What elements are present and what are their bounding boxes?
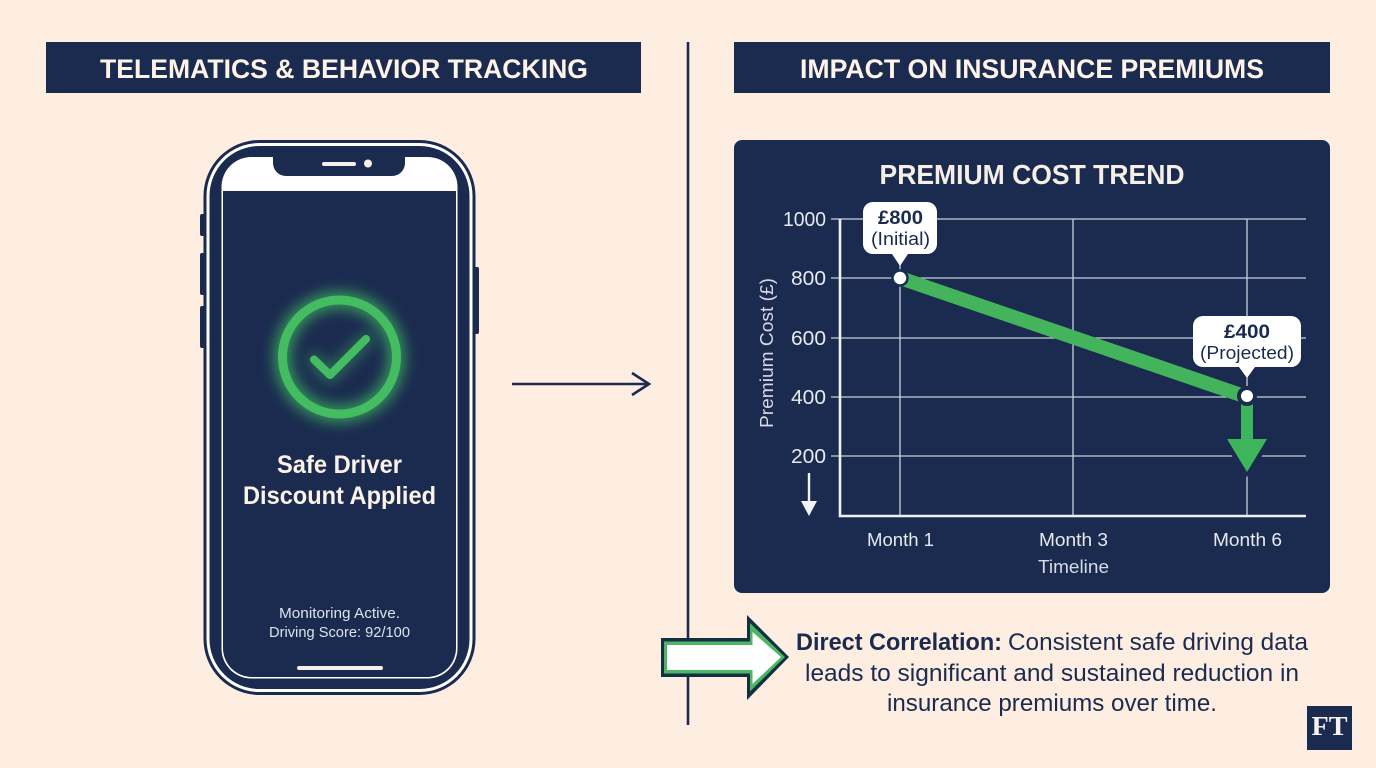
y axis tick labels: 1000 <box>783 209 826 231</box>
data point: initial <box>892 270 908 286</box>
arrow: green outlined pointer <box>661 615 789 700</box>
chart axes <box>840 219 1306 516</box>
callout: £800 initial: £800 <box>878 208 923 229</box>
chart title: PREMIUM COST TREND <box>880 159 1184 190</box>
x axis title: Timeline <box>1038 557 1109 577</box>
right header: premiums: IMPACT ON INSURANCE PREMIUMS <box>800 54 1264 84</box>
discount message: Safe Driver <box>277 451 402 479</box>
discount message <box>243 451 436 510</box>
discount message: Discount Applied <box>243 482 436 510</box>
panel: premium cost trend chart <box>734 140 1330 593</box>
notch speaker and camera <box>322 160 372 168</box>
correlation statement: insurance premiums over time. <box>887 690 1217 717</box>
phone body <box>204 140 476 695</box>
x axis labels: Month 1 <box>867 530 934 550</box>
x axis labels: Month 3 <box>1039 530 1108 550</box>
monitoring status <box>269 605 410 641</box>
callout: £800 initial <box>863 202 937 266</box>
trend line <box>900 278 1247 397</box>
x axis labels <box>867 530 1282 550</box>
y axis tick labels: 800 <box>791 268 826 290</box>
phone side buttons <box>200 214 479 348</box>
correlation statement: leads to significant and sustained reduction in <box>805 660 1299 687</box>
callout: £400 projected: £400 <box>1224 322 1270 343</box>
chart gridlines <box>831 219 1306 516</box>
phone screen <box>222 157 458 678</box>
logo: FT: FT <box>1312 711 1348 741</box>
x axis labels: Month 6 <box>1213 530 1282 550</box>
phone notch <box>273 156 405 176</box>
y axis tick labels: 400 <box>791 387 826 409</box>
correlation statement: Consistent safe driving data <box>1008 629 1309 656</box>
y axis title: Premium Cost (£) <box>757 278 777 428</box>
left header: telematics <box>46 42 641 93</box>
callout: £400 projected <box>1193 316 1301 378</box>
vertical divider <box>687 42 689 725</box>
correlation statement: Direct Correlation: <box>796 629 1002 656</box>
right header: premiums <box>734 42 1330 93</box>
logo: FT <box>1307 706 1352 750</box>
y axis tick labels <box>783 209 826 468</box>
callout: £800 initial: (Initial) <box>871 228 930 249</box>
data point: projected <box>1239 388 1255 404</box>
y axis tick labels: 200 <box>791 446 826 468</box>
callout: £400 projected: (Projected) <box>1200 342 1294 363</box>
home indicator <box>297 666 383 670</box>
arrow: phone to chart <box>512 373 649 395</box>
monitoring status: Driving Score: 92/100 <box>269 624 410 641</box>
y axis tick labels: 600 <box>791 328 826 350</box>
arrow: green drop <box>1227 400 1267 472</box>
correlation statement <box>796 629 1309 717</box>
monitoring status: Monitoring Active. <box>279 605 400 622</box>
phone mockup <box>200 140 479 695</box>
icon: green check in glowing circle <box>282 300 396 414</box>
left header: telematics: TELEMATICS & BEHAVIOR TRACKING <box>100 54 588 84</box>
icon: down arrow on y axis <box>801 473 817 516</box>
